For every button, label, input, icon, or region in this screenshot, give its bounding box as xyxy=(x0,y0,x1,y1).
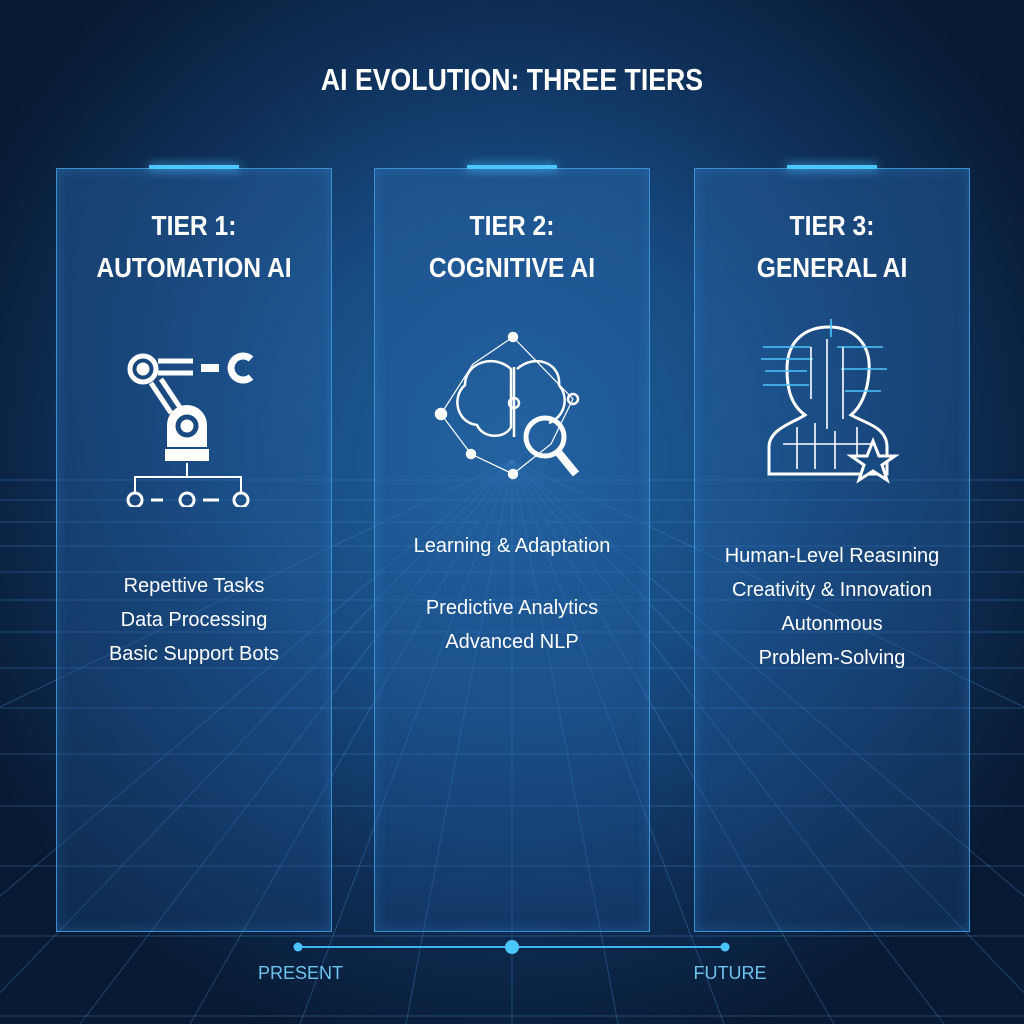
heading tier 1: AUTOMATION AI xyxy=(96,252,292,283)
heading tier 2: TIER 2: xyxy=(470,210,554,241)
text: tier 3 features: Creativity & Innovation xyxy=(732,579,932,601)
panel: tier 3 xyxy=(694,168,970,932)
text: tier 1 features: Repettive Tasks xyxy=(124,575,264,597)
label: present: PRESENT xyxy=(258,963,343,983)
text: tier 3 features: Problem-Solving xyxy=(759,647,905,669)
panel: tier 1 xyxy=(56,168,332,932)
heading tier 1: TIER 1: xyxy=(152,210,236,241)
heading tier 2: COGNITIVE AI xyxy=(429,252,595,283)
heading tier 1 xyxy=(96,210,292,283)
panel: tier 2: Advanced NLP xyxy=(445,631,579,653)
text: tier 1 features xyxy=(109,575,279,665)
heading tier 3: GENERAL AI xyxy=(757,252,907,283)
text: tier 3 features: Human-Level Reasıning xyxy=(725,545,939,567)
text: tier 2 features: Learning & Adaptation xyxy=(414,535,610,557)
title: AI EVOLUTION: THREE TIERS xyxy=(321,62,703,97)
timeline xyxy=(258,940,766,983)
text: tier 1 features: Basic Support Bots xyxy=(109,643,279,665)
label: future: FUTURE xyxy=(694,963,766,983)
text: tier 3 features xyxy=(725,545,939,669)
text: tier 3 features: Autonmous xyxy=(781,613,883,635)
panel: tier 2 xyxy=(374,168,650,932)
heading tier 3: TIER 3: xyxy=(790,210,874,241)
heading tier 2 xyxy=(429,210,595,283)
icon: robot arm xyxy=(126,352,254,507)
icon: brain with magnifier xyxy=(434,332,580,480)
heading tier 3 xyxy=(757,210,907,283)
icon: circuit head with star xyxy=(761,319,900,484)
text: tier 1 features: Data Processing xyxy=(121,609,267,631)
panel: tier 2: Predictive Analytics xyxy=(426,597,598,619)
